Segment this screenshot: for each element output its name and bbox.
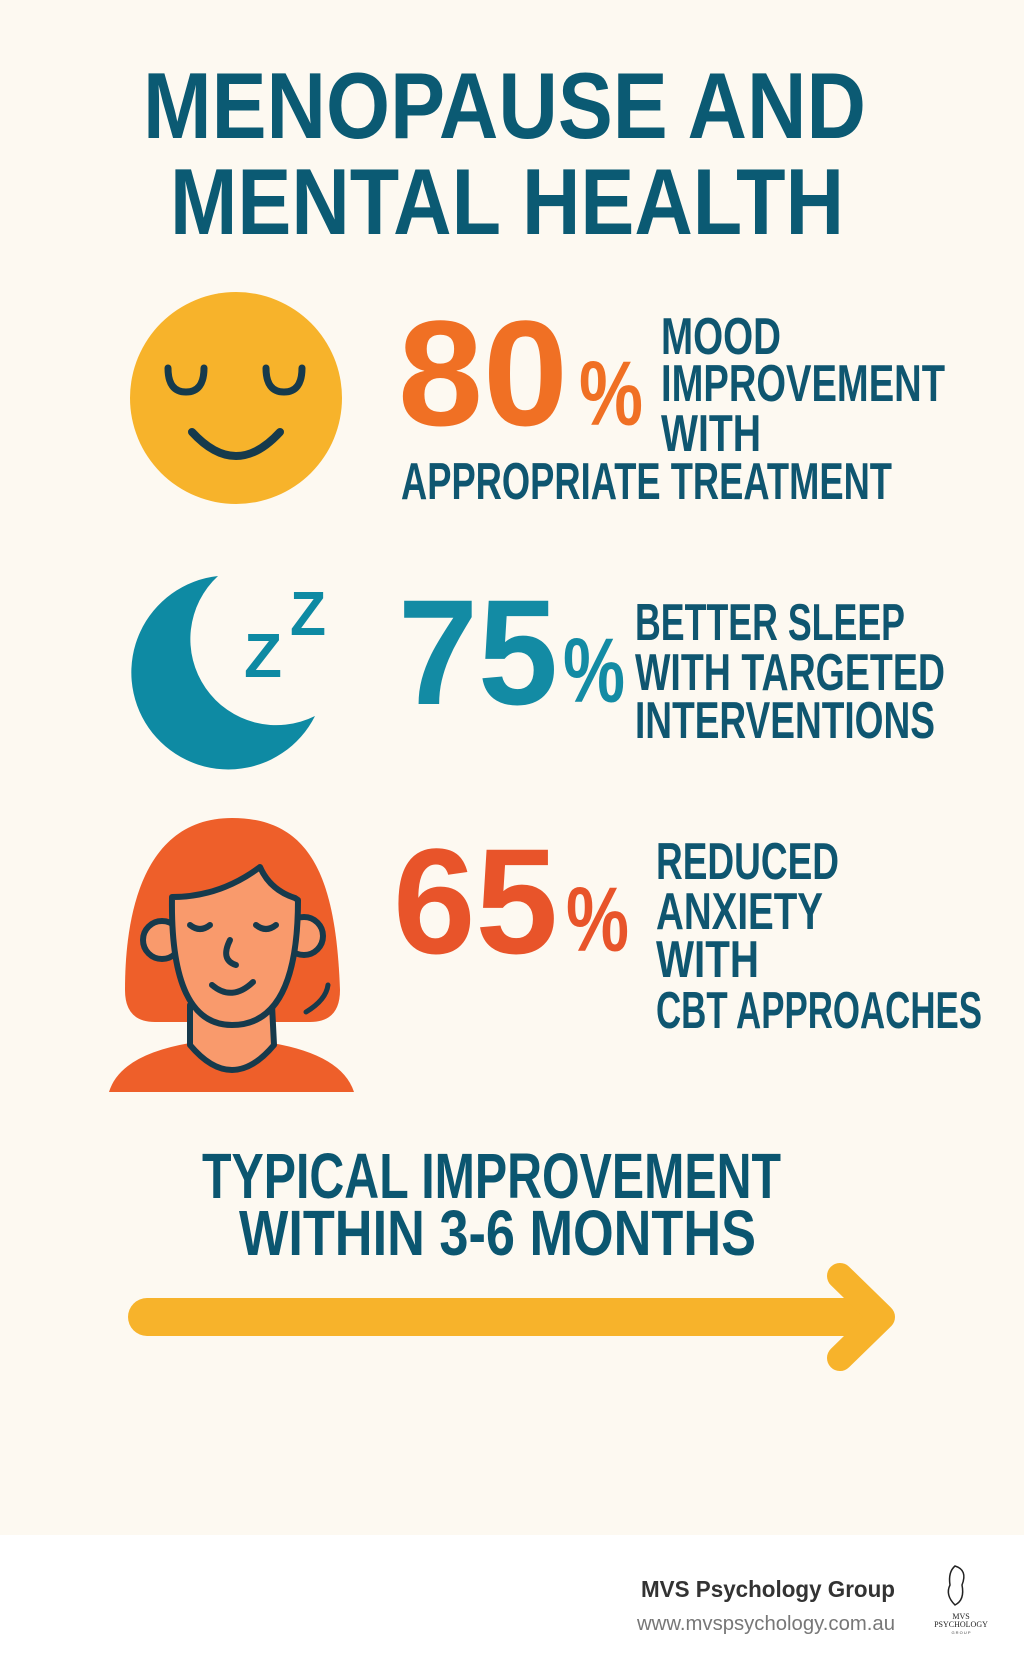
footer: brand text: www.mvspsychology.com.au <box>636 1613 895 1635</box>
stat: 80% mood: % <box>579 343 643 445</box>
icon: moon with zz: Z <box>290 580 326 649</box>
footer: logo: MVS <box>952 1612 970 1621</box>
stat: 80% mood: MOOD <box>661 308 781 366</box>
stat: 65% anxiety <box>393 817 982 1040</box>
footer: logo: PSYCHOLOGY <box>934 1620 988 1629</box>
icon: smiling face <box>130 292 342 504</box>
heading: typical improvement: TYPICAL IMPROVEMENT <box>202 1140 781 1212</box>
stat: 75% sleep: BETTER SLEEP <box>635 594 905 652</box>
icon: moon with zz <box>131 576 326 769</box>
icon: moon with zz: Z <box>244 622 282 691</box>
stat: 65% anxiety: WITH <box>656 931 759 989</box>
stat: 80% mood: 80 <box>398 289 568 457</box>
heading: typical improvement <box>202 1140 781 1269</box>
footer: logo <box>934 1566 988 1635</box>
stat: 65% anxiety: ANXIETY <box>656 883 823 941</box>
icon: woman face <box>109 818 354 1092</box>
stat: 65% anxiety: 65 <box>393 817 558 985</box>
footer: logo: G R O U P <box>951 1630 971 1635</box>
arrow <box>147 1276 882 1358</box>
stat: 65% anxiety: REDUCED <box>656 833 839 891</box>
footer: brand text: MVS Psychology Group <box>641 1576 895 1602</box>
title <box>143 53 866 254</box>
title: MENTAL HEALTH <box>170 149 844 254</box>
footer: brand text <box>636 1576 895 1635</box>
heading: typical improvement: WITHIN 3-6 MONTHS <box>239 1197 756 1269</box>
stat: 80% mood <box>398 289 945 511</box>
stat: 65% anxiety: % <box>566 869 629 971</box>
title: MENOPAUSE AND <box>143 53 866 158</box>
stat: 80% mood: WITH <box>661 405 761 463</box>
stat: 75% sleep: % <box>563 620 625 722</box>
stat: 75% sleep: 75 <box>398 568 558 736</box>
stat: 75% sleep <box>398 568 945 750</box>
